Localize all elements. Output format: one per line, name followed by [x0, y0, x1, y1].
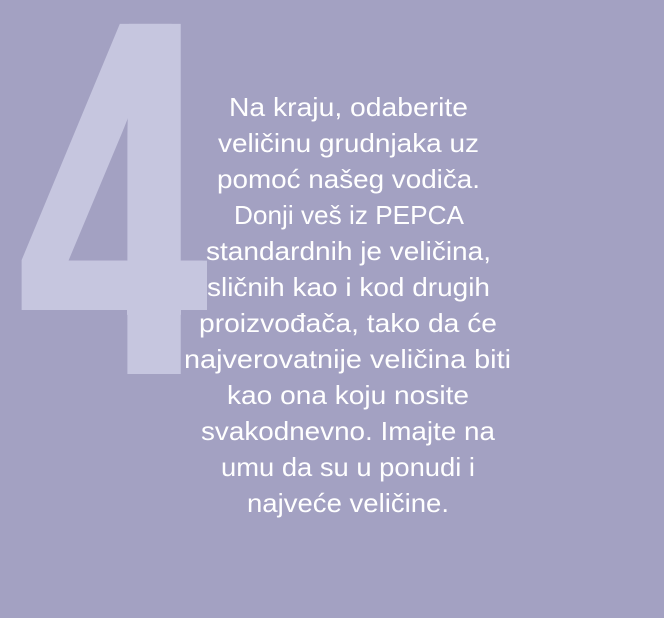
body text block: umu da su u ponudi i — [221, 452, 475, 482]
body text block: svakodnevno. Imajte na — [201, 416, 496, 446]
body text block: sličnih kao i kod drugih — [207, 272, 490, 302]
body text block: standardnih je veličina, — [206, 236, 491, 266]
body text block: Donji veš iz PEPCA — [234, 200, 465, 230]
body text block: Na kraju, odaberite — [229, 92, 468, 122]
body text block: proizvođača, tako da će — [199, 308, 497, 338]
body text block: veličinu grudnjaka uz — [218, 128, 479, 158]
body text block: najverovatnije veličina biti — [184, 344, 511, 374]
body text block: pomoć našeg vodiča. — [217, 164, 480, 194]
body text block: najveće veličine. — [247, 488, 449, 518]
body text block — [184, 92, 511, 518]
large step number 4 — [22, 24, 207, 374]
body text block: kao ona koju nosite — [227, 380, 469, 410]
infographic panel — [22, 24, 510, 518]
